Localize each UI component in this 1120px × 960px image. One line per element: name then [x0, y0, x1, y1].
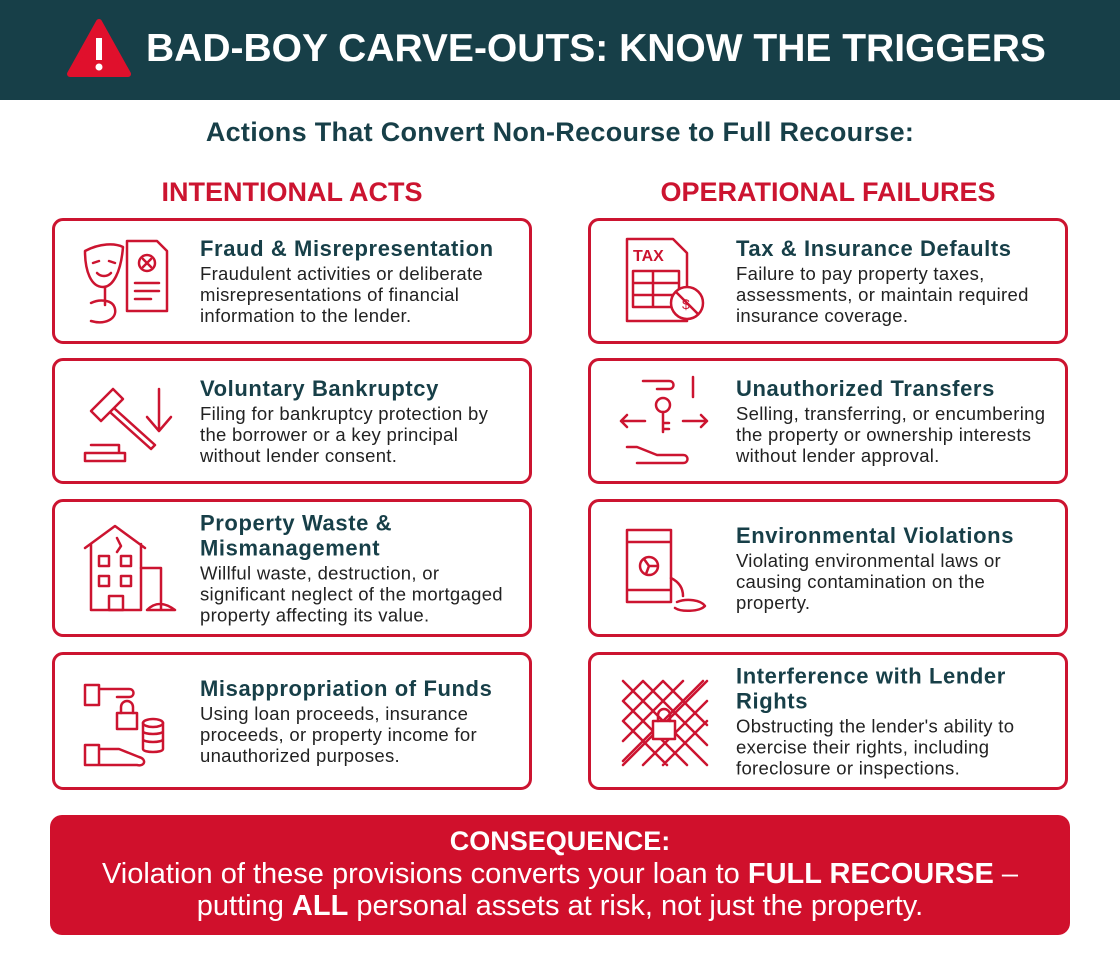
text: the property or ownership interests	[736, 424, 1031, 445]
text: assessments, or maintain required	[736, 284, 1029, 305]
consequence heading: CONSEQUENCE:	[450, 826, 670, 856]
text: Rights	[736, 688, 808, 714]
text: Obstructing the lender's ability to	[736, 716, 1014, 736]
text: without lender consent.	[200, 445, 397, 466]
text: Filing for bankruptcy protection by	[200, 403, 488, 424]
text: insurance coverage.	[736, 305, 908, 326]
text: unauthorized purposes.	[200, 745, 400, 766]
text: Violating environmental laws or	[736, 550, 1001, 571]
text: Mismanagement	[200, 536, 380, 560]
card: property waste	[52, 499, 532, 637]
text: property affecting its value.	[200, 604, 429, 626]
consequence box	[50, 815, 1070, 935]
consequence text: Violation of these provisions converts your loan to FULL RECOURSE –	[102, 858, 1018, 890]
consequence text	[102, 858, 1018, 922]
text	[200, 376, 488, 466]
card: fraud	[52, 218, 532, 344]
icon: damaged building	[84, 524, 176, 612]
text: Using loan proceeds, insurance	[200, 703, 468, 724]
card: transfers	[588, 358, 1068, 484]
text: Willful waste, destruction, or	[200, 562, 439, 584]
icon: hand, lock, coins	[84, 684, 164, 767]
text: Tax & Insurance Defaults	[736, 236, 1012, 261]
text: Property Waste &	[200, 510, 392, 536]
text: foreclosure or inspections.	[736, 758, 960, 778]
text: misrepresentations of financial	[200, 284, 459, 305]
icon: mask and document	[84, 240, 168, 324]
heading: operational failures: OPERATIONAL FAILURES	[660, 177, 996, 207]
card: interference	[588, 652, 1068, 790]
text: Selling, transferring, or encumbering	[736, 403, 1045, 424]
text: significant neglect of the mortgaged	[200, 584, 503, 604]
card: misappropriation	[52, 652, 532, 790]
card: environmental	[588, 499, 1068, 637]
text: Failure to pay property taxes,	[736, 263, 985, 284]
text	[200, 510, 503, 626]
text: Fraudulent activities or deliberate	[200, 263, 483, 284]
text: the borrower or a key principal	[200, 424, 458, 445]
icon: key and arrows	[620, 376, 708, 464]
subtitle: Actions That Convert Non-Recourse to Full Recourse:	[206, 117, 914, 147]
card: bankruptcy	[52, 358, 532, 484]
heading: intentional acts: INTENTIONAL ACTS	[162, 177, 422, 207]
text: Voluntary Bankruptcy	[200, 376, 439, 401]
text	[736, 664, 1014, 778]
text	[736, 523, 1014, 613]
text: causing contamination on the	[736, 571, 985, 592]
icon: tax document: TAX	[633, 248, 664, 265]
icon: gavel	[84, 388, 172, 462]
text: Fraud & Misrepresentation	[200, 236, 494, 261]
text: Environmental Violations	[736, 523, 1014, 548]
text	[736, 376, 1045, 466]
text	[736, 236, 1029, 326]
title: BAD-BOY CARVE-OUTS: KNOW THE TRIGGERS	[146, 27, 1046, 70]
text: information to the lender.	[200, 305, 411, 326]
consequence text: putting ALL personal assets at risk, not just the property.	[197, 890, 923, 922]
text: exercise their rights, including	[736, 736, 989, 758]
text: without lender approval.	[736, 445, 940, 466]
text: Misappropriation of Funds	[200, 676, 492, 701]
text: Unauthorized Transfers	[736, 376, 995, 401]
text	[200, 236, 494, 326]
icon: tax document	[626, 238, 704, 322]
text: property.	[736, 592, 810, 613]
text	[200, 676, 492, 766]
icon: warning triangle	[67, 19, 131, 77]
icon: leaking barrel	[626, 528, 706, 612]
text: proceeds, or property income for	[200, 724, 477, 745]
text: Interference with Lender	[736, 664, 1006, 688]
header	[0, 0, 1120, 100]
icon: tax document: $	[682, 296, 690, 312]
card: tax	[588, 218, 1068, 344]
icon: chain fence with lock	[622, 680, 708, 766]
